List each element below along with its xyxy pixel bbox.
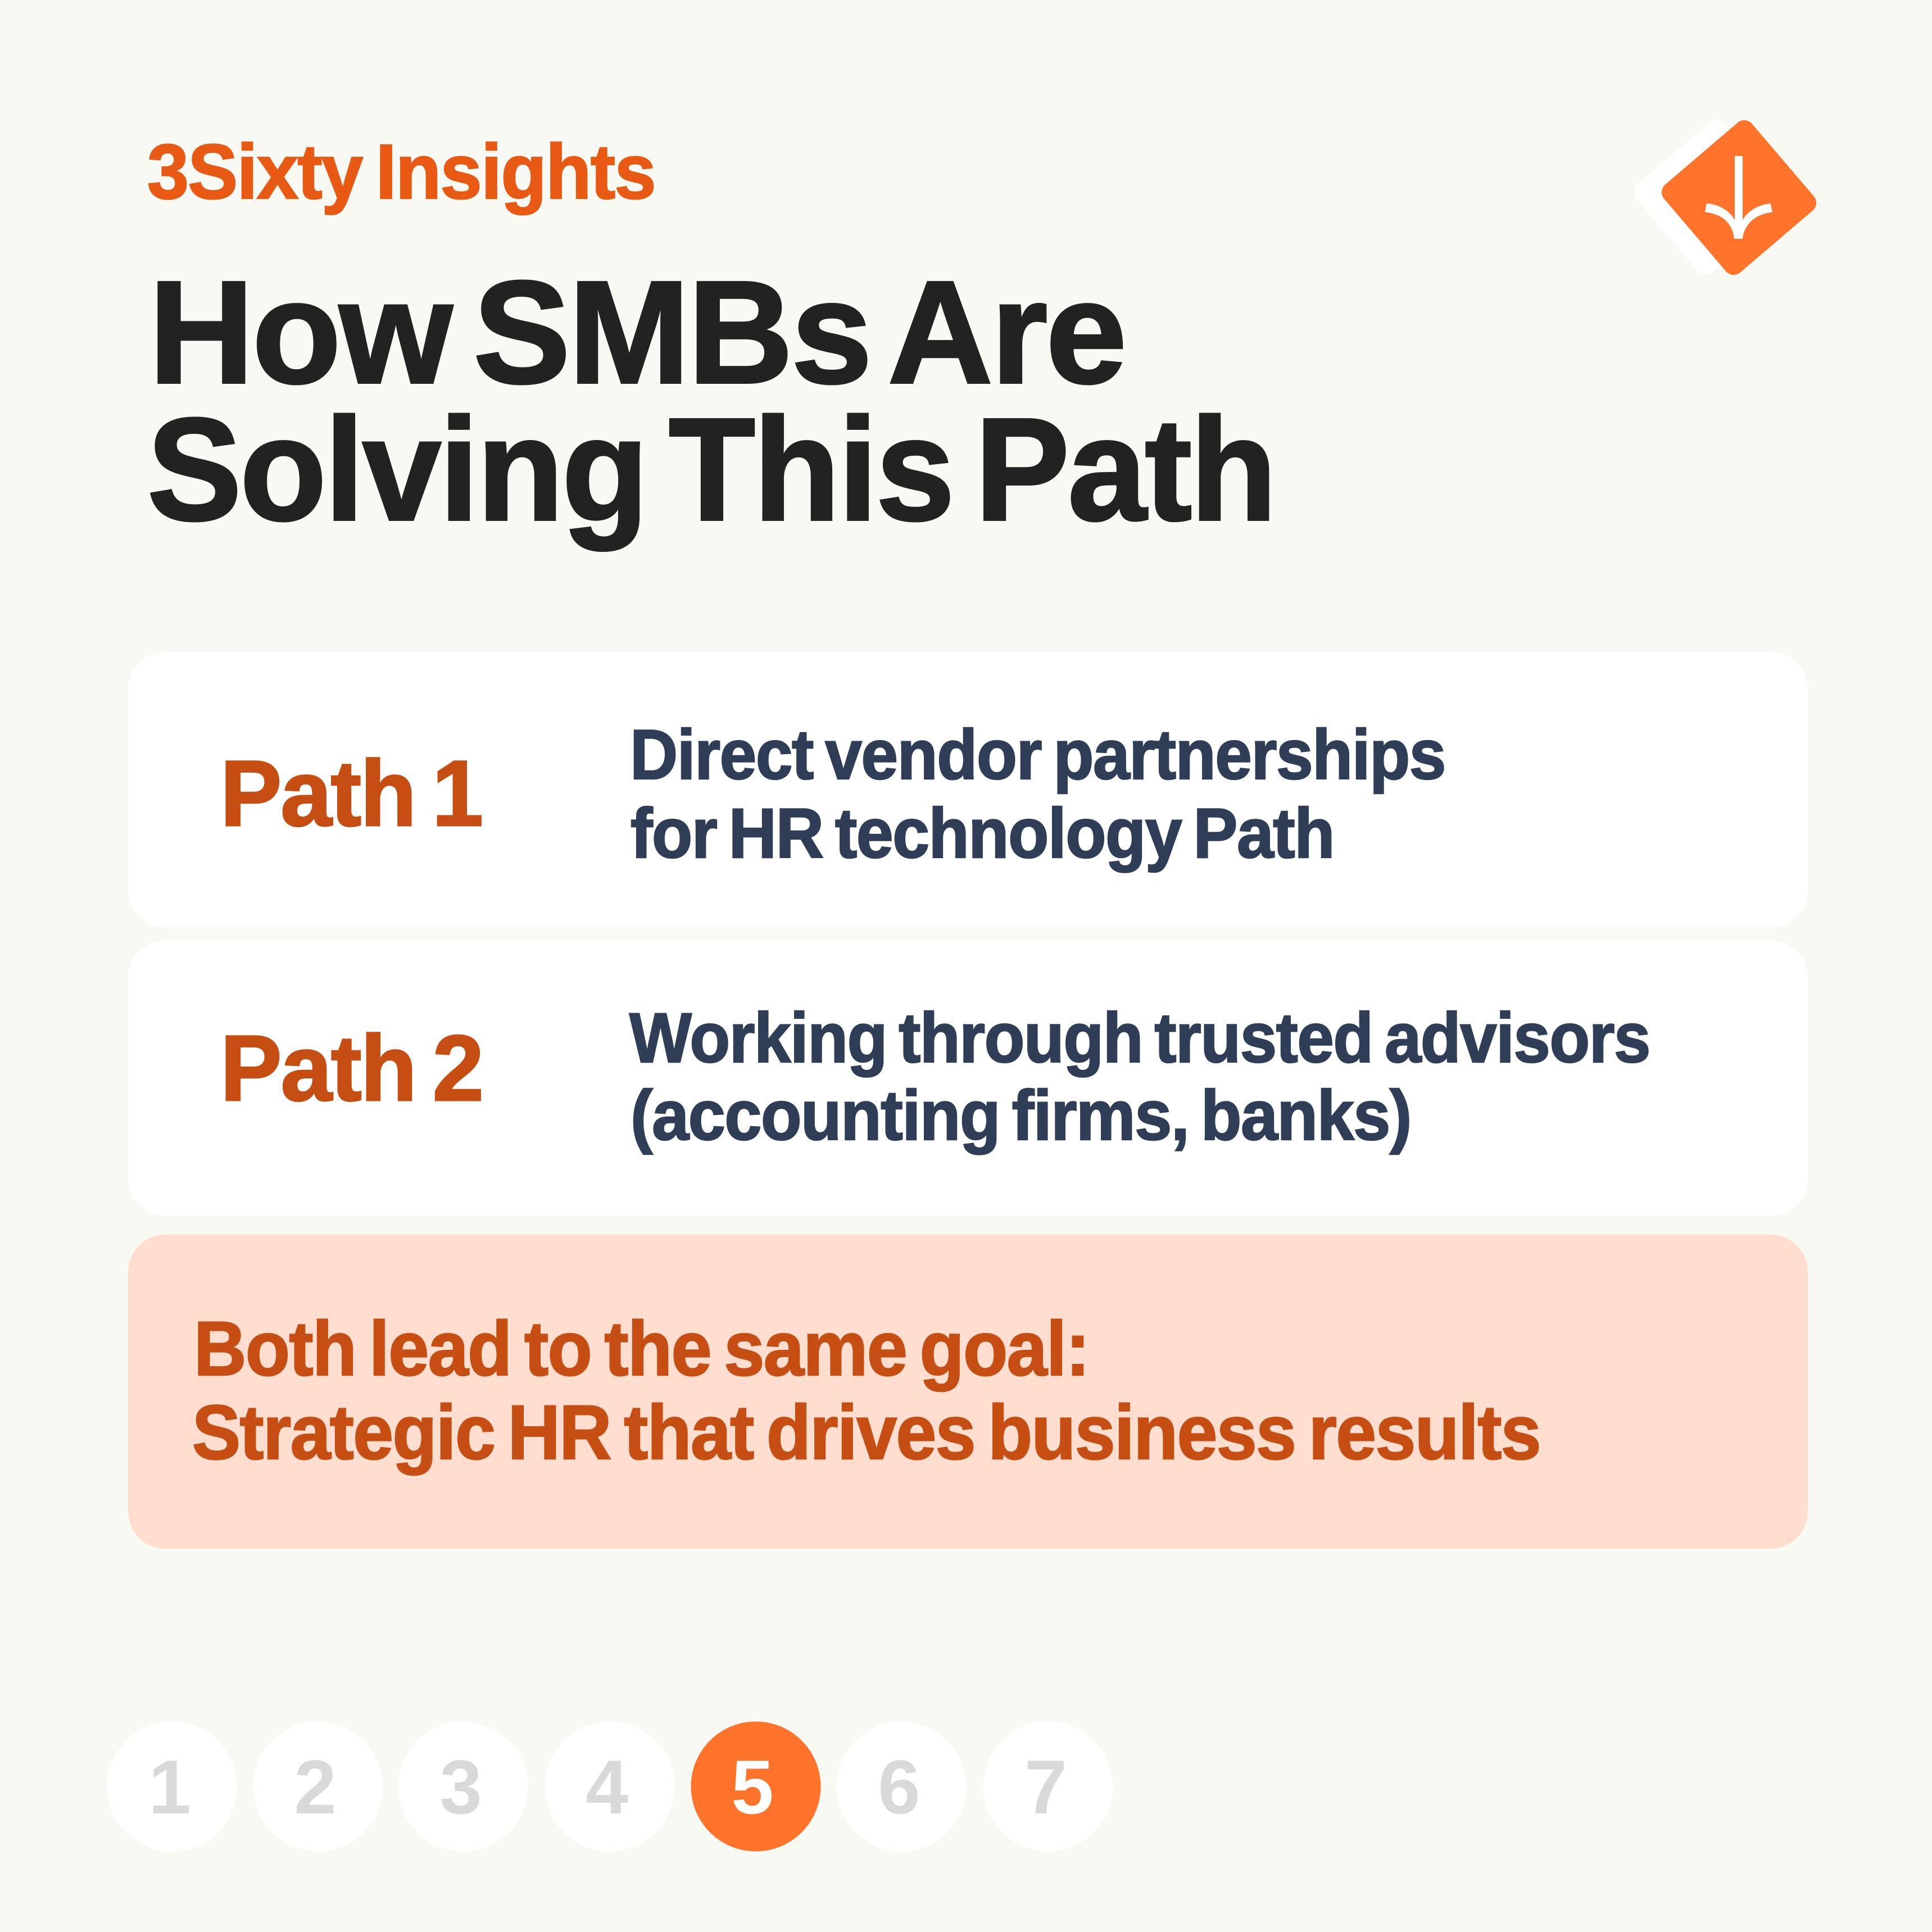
path 2 description: Working through trusted advisors: [629, 999, 1650, 1077]
page 3: [398, 1722, 528, 1851]
callout text: [192, 1306, 1540, 1476]
panel: path 1: [128, 652, 1808, 927]
callout text: Both lead to the same goal:: [194, 1306, 1089, 1392]
page 6: 6: [878, 1744, 920, 1830]
path 2 description: (accounting firms, banks): [631, 1077, 1411, 1155]
icon: logo diamond with arrow: [1630, 116, 1820, 279]
page 4: 4: [586, 1744, 628, 1830]
page 1: 1: [148, 1744, 191, 1830]
path 2 description: [629, 999, 1650, 1155]
pagination: [107, 1722, 1113, 1851]
path 1 description: [630, 716, 1445, 873]
path 1 description: for HR technology Path: [631, 795, 1334, 873]
page 5 active: 5: [731, 1744, 774, 1830]
page 7: 7: [1024, 1744, 1067, 1830]
page 3: 3: [439, 1744, 482, 1830]
callout: shared goal: [128, 1235, 1808, 1549]
page 4: [545, 1722, 674, 1851]
brand eyebrow: 3Sixty Insights: [147, 129, 655, 215]
title: [147, 251, 1275, 552]
page 2: [253, 1722, 383, 1851]
panel: path 2: [128, 940, 1808, 1216]
title: Solving This Path: [147, 388, 1275, 552]
path 1 description: Direct vendor partnerships: [630, 716, 1445, 794]
path 1 label: Path 1: [220, 742, 482, 846]
page 5 active: [691, 1722, 820, 1851]
page 2: 2: [294, 1744, 337, 1830]
path 2 label: Path 2: [220, 1017, 483, 1121]
callout text: Strategic HR that drives business results: [192, 1390, 1540, 1476]
page 6: [836, 1722, 967, 1851]
title: How SMBs Are: [149, 251, 1125, 414]
page 7: [983, 1722, 1113, 1851]
page 1: [107, 1722, 237, 1851]
